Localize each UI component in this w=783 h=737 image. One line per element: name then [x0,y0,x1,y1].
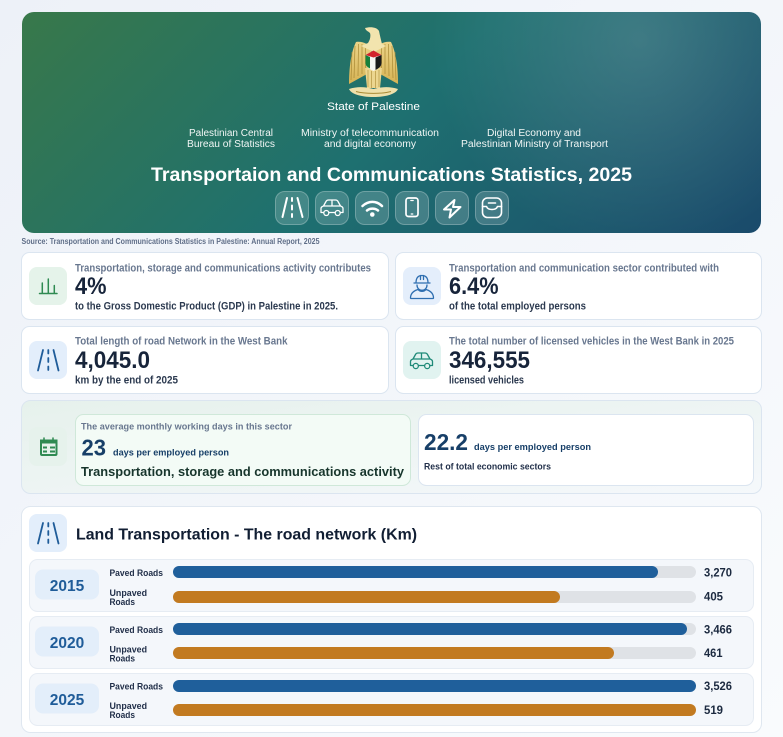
number: 4,045.0: 4,045.0 [75,347,150,374]
text: Palestinian Central Bureau of Statistics: Palestinian Central [189,128,273,139]
icon: wifi [356,192,388,224]
bar: paved roads 2025: 3,526 [704,681,732,693]
bar: unpaved roads 2015: 405 [704,592,724,604]
number: 23: 23 [82,434,106,460]
icon: bar chart [29,267,67,305]
bar: unpaved roads 2025 [110,701,723,720]
label: year 2025 [35,684,99,714]
bar: unpaved roads 2025: 519 [704,705,723,717]
text: GDP caption: to the Gross Domestic Product (GDP) in Palestine in 2025. [75,300,338,312]
row: 2025 [30,674,754,726]
panel: GDP contribution card [22,252,388,320]
bar: unpaved roads 2020: Roads [110,654,135,664]
bar: unpaved roads 2015: Unpaved [110,588,147,598]
number: 346,555: 346,555 [449,347,530,374]
icon: emblem shield [366,50,382,71]
icon: road [29,341,67,379]
icon: smartphone [396,192,428,224]
text: Palestinian Central Bureau of Statistics [187,128,275,150]
text: working days label: The average monthly working days in this sector [81,422,292,432]
row: 2015 [30,560,754,612]
bar: paved roads 2015: Paved Roads [110,568,163,578]
text: sector name: Transportation, storage and communications activity [81,464,405,479]
icon: worker with helmet [403,267,441,305]
icon: Palestinian eagle emblem [349,27,398,97]
bar: unpaved roads 2015: Roads [110,597,135,607]
text: Ministry of telecommunication: Ministry of telecommunication [301,128,439,139]
icon: tray [476,192,508,224]
text: road length label: Total length of road Network in the West Bank [75,336,288,348]
icon: car [403,341,441,379]
bar: paved roads 2020: 3,466 [704,624,732,636]
text: road length caption: km by the end of 2025 [75,374,178,386]
icon: road [29,514,67,552]
bar: paved roads 2025 [110,680,732,693]
bar: unpaved roads 2020: 461 [704,648,723,660]
text: rest of economic sectors: Rest of total economic sectors [424,462,551,472]
text: GDP label: Transportation, storage and communications activity contributes [75,262,371,274]
number: 4%: 4% [75,273,106,300]
number: 6.4%: 6.4% [449,273,498,300]
panel: rest of economy card [418,414,754,486]
number: 22.2: 22.2 [424,429,468,455]
bar: unpaved roads 2020: Unpaved [110,644,147,654]
panel: land transportation road network [22,506,762,732]
label: year 2020 [35,626,99,656]
bar: paved roads 2015 [110,566,732,580]
icon row: sector icons [276,192,508,224]
heading: State of Palestine: State of Palestine [327,101,420,113]
text: employment label: Transportation and communication sector contributed with [449,262,719,274]
text: Digital Economy and Ministry of Transport [461,128,608,150]
icon: road [276,192,308,224]
bar: unpaved roads 2020 [110,644,723,664]
panel: hero header [22,12,761,233]
text: Digital Economy and Ministry of Transport: Digital Economy and [487,128,581,139]
bar: unpaved roads 2025: Roads [110,710,135,720]
bar: unpaved roads 2015 [110,588,724,607]
text: Digital Economy and Ministry of Transport: Palestinian Ministry of Transport [461,139,608,150]
heading: land transportation: Land Transportation - The road network (Km) [76,526,417,544]
label: year 2015 [35,570,99,600]
panel: employment card [396,252,762,320]
bar: paved roads 2015: 3,270 [704,568,732,580]
text: vehicles label: The total number of licensed vehicles in the West Bank in 2025 [449,336,734,348]
panel: sector working days card [76,414,410,486]
text: employment caption: of the total employed persons [449,300,586,312]
text: days per employed person: days per employed person [474,442,591,453]
bar: unpaved roads 2025: Unpaved [110,701,147,711]
panel: road length card [22,326,388,394]
title: Transportaion and Communications Statistics, 2025 [151,164,632,186]
text: Ministry of telecommunication [301,128,439,150]
panel: licensed vehicles card [396,326,762,394]
panel: working days [22,400,762,494]
text: Palestinian Central Bureau of Statistics: Bureau of Statistics [187,139,275,150]
icon: calendar [29,427,67,466]
icon: car [316,192,348,224]
bar: paved roads 2020 [110,623,732,636]
text: vehicles caption: licensed vehicles [449,374,524,386]
bar: paved roads 2020: Paved Roads [110,625,163,635]
label: year 2020: 2020 [50,635,84,652]
label: year 2025: 2025 [50,692,85,709]
text: Ministry of telecommunication: and digital economy [324,139,416,150]
bar: paved roads 2025: Paved Roads [110,682,163,692]
label: year 2015: 2015 [50,578,85,595]
row: 2020 [30,616,754,668]
text: days per employed person: days per employed person [113,448,229,458]
source note: Source: Transportation and Communications Statistics in Palestine: Annual Report, 2025 [22,237,320,246]
icon: lightning bolt [436,192,468,224]
